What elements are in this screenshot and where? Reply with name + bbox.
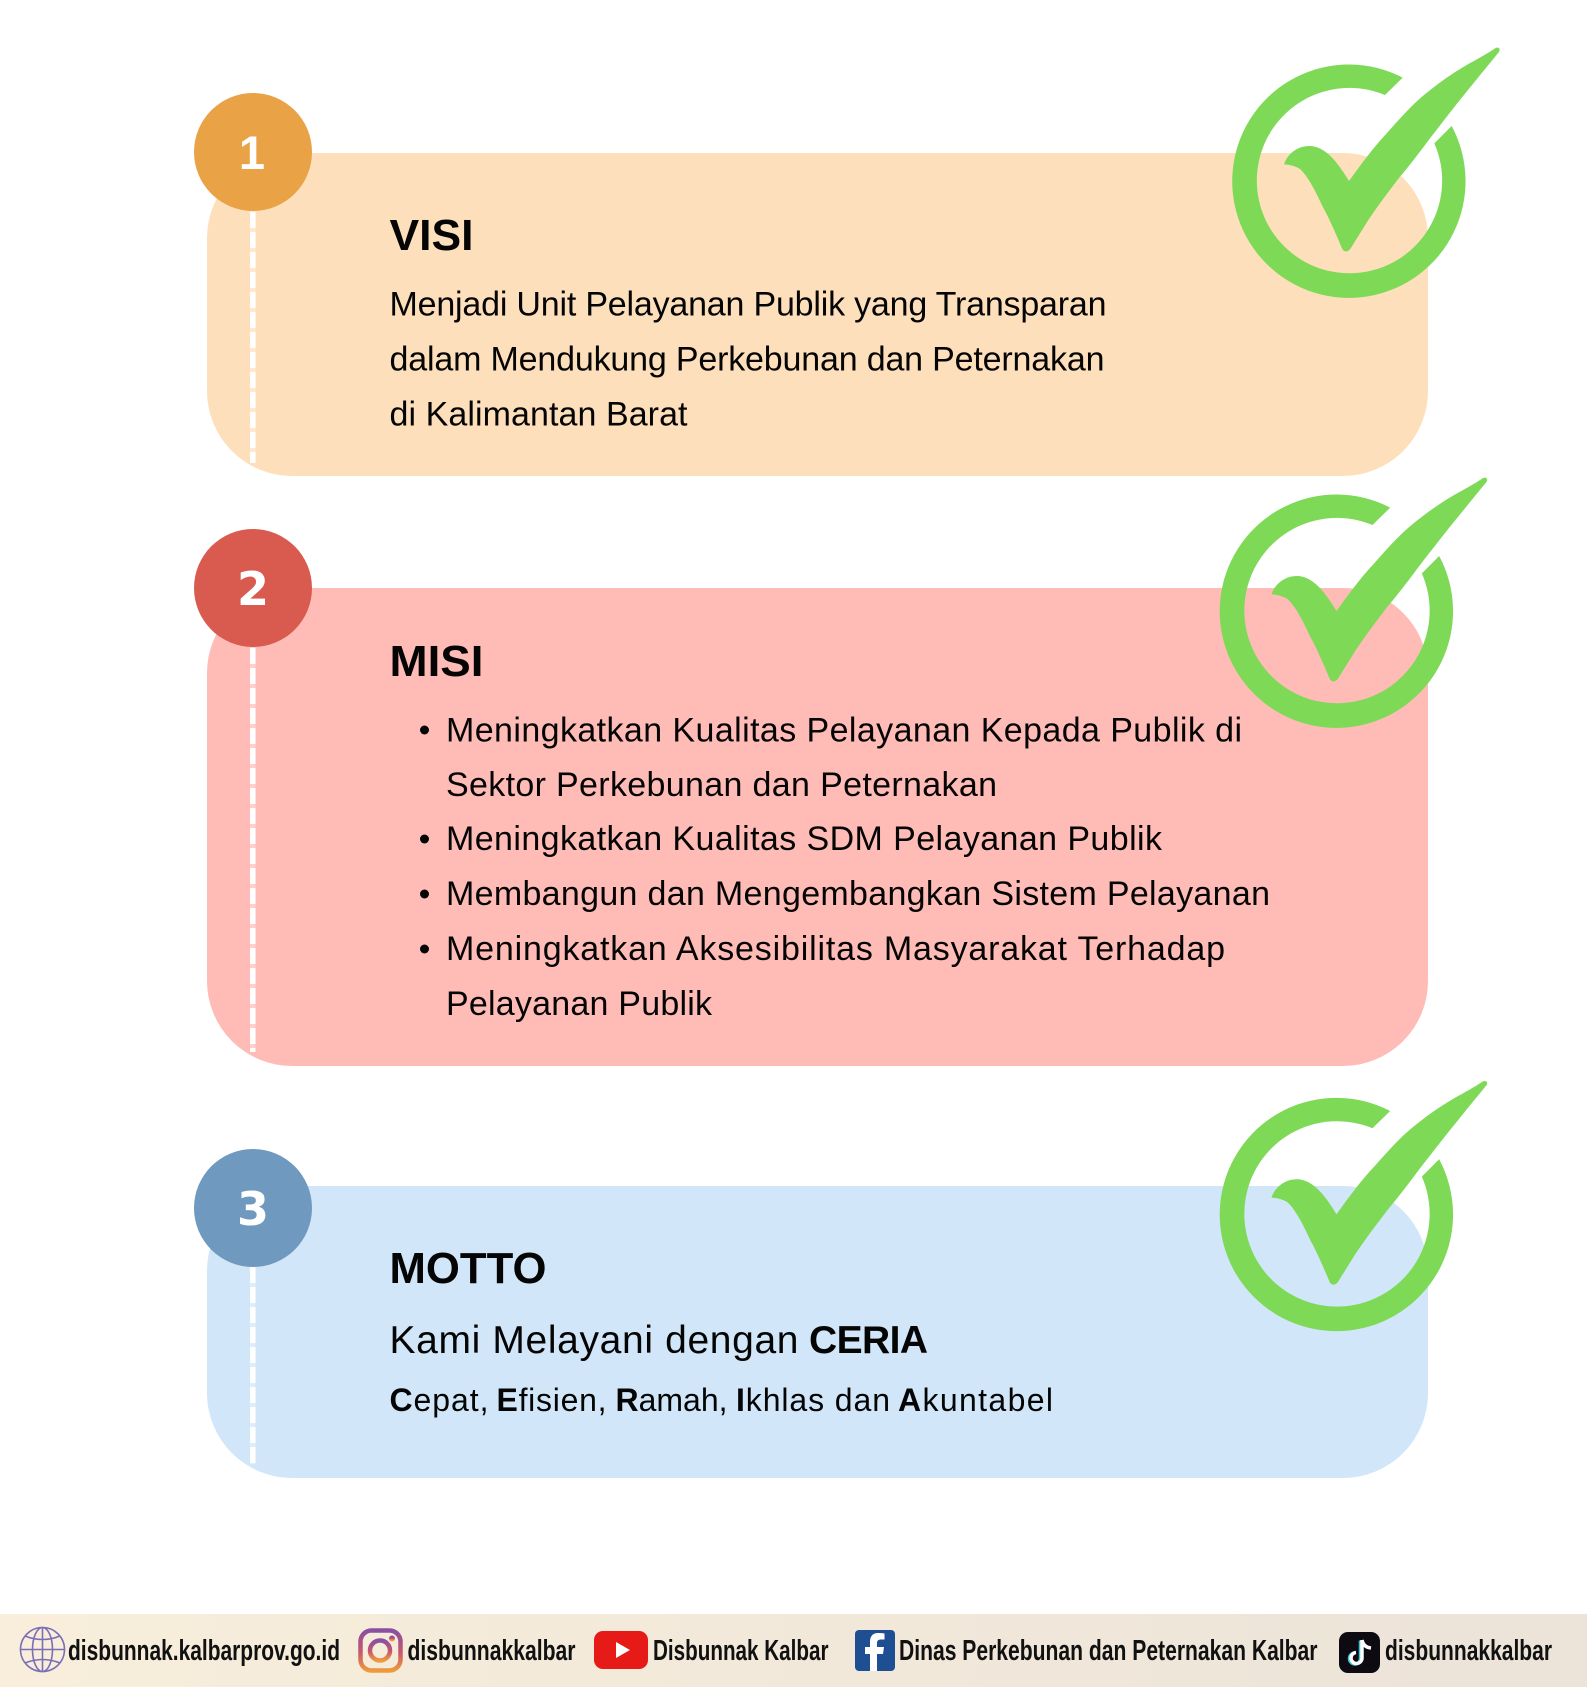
text: ceria expansion: Ikhlas dan [736,1382,890,1418]
bullet list: misi items: Sektor Perkebunan dan Peternakan [446,766,997,804]
text block: visi statement [390,286,1106,434]
icon: youtube [594,1631,648,1669]
bullet list: misi items: Pelayanan Publik [446,985,713,1023]
icon: globe [20,1628,64,1672]
icon: instagram [360,1630,400,1670]
text block: visi statement: Menjadi Unit Pelayanan Publik yang Transparan [390,286,1106,324]
panel: motto [194,1081,1487,1478]
bullet list: misi items: Meningkatkan Aksesibilitas Masyarakat Terhadap [446,930,1225,968]
icon: green check mark [1232,48,1500,298]
icon: green check mark [1220,1081,1487,1331]
text: ceria expansion: Ramah, [616,1382,728,1418]
dashed connector: motto [250,1266,256,1464]
text: ceria expansion: Efisien, [496,1382,606,1418]
dashed connector: visi [250,211,256,463]
number badge 3: 3 [237,1182,269,1236]
bullet list: misi items [420,712,1270,1023]
text: website: disbunnak.kalbarprov.go.id [68,1635,340,1667]
text: motto line: CERIA [809,1319,928,1362]
card background: motto [207,1186,1428,1478]
bullet list: misi items: Meningkatkan Kualitas Pelayanan Kepada Publik di [446,712,1242,750]
dashed connector: misi [250,647,256,1052]
number badge 2 [194,529,312,647]
icon: green check mark [1220,478,1487,728]
heading: VISI: VISI [390,211,474,260]
heading: MOTTO: MOTTO [390,1244,546,1293]
text: facebook handle: Dinas Perkebunan dan Peternakan Kalbar [899,1635,1318,1667]
panel: misi [194,478,1487,1066]
panel: visi [194,48,1500,476]
card background: visi [207,153,1428,476]
bullet list: misi items: Meningkatkan Kualitas SDM Pelayanan Publik [446,820,1163,858]
icon: facebook [855,1630,895,1671]
footer background [0,1614,1587,1687]
footer bar [0,1614,1587,1687]
text: motto line: Kami Melayani dengan [390,1319,798,1362]
heading: MISI: MISI [390,637,484,686]
number badge 2: 2 [237,562,269,616]
text: ceria expansion: Cepat, [390,1382,488,1418]
text block: visi statement: dalam Mendukung Perkebunan dan Peternakan [390,340,1104,378]
text: youtube handle: Disbunnak Kalbar [653,1635,828,1667]
number badge 3 [194,1149,312,1267]
card background: misi [207,588,1428,1066]
text block: visi statement: di Kalimantan Barat [390,396,688,434]
text: ceria expansion: Akuntabel [898,1382,1053,1418]
number badge 1 [194,93,312,211]
text: instagram handle: disbunnakkalbar [408,1635,576,1667]
text: ceria expansion [390,1382,1053,1418]
icon: tiktok [1339,1632,1380,1673]
number badge 1: 1 [239,126,265,179]
bullet list: misi items: Membangun dan Mengembangkan Sistem Pelayanan [446,875,1270,913]
